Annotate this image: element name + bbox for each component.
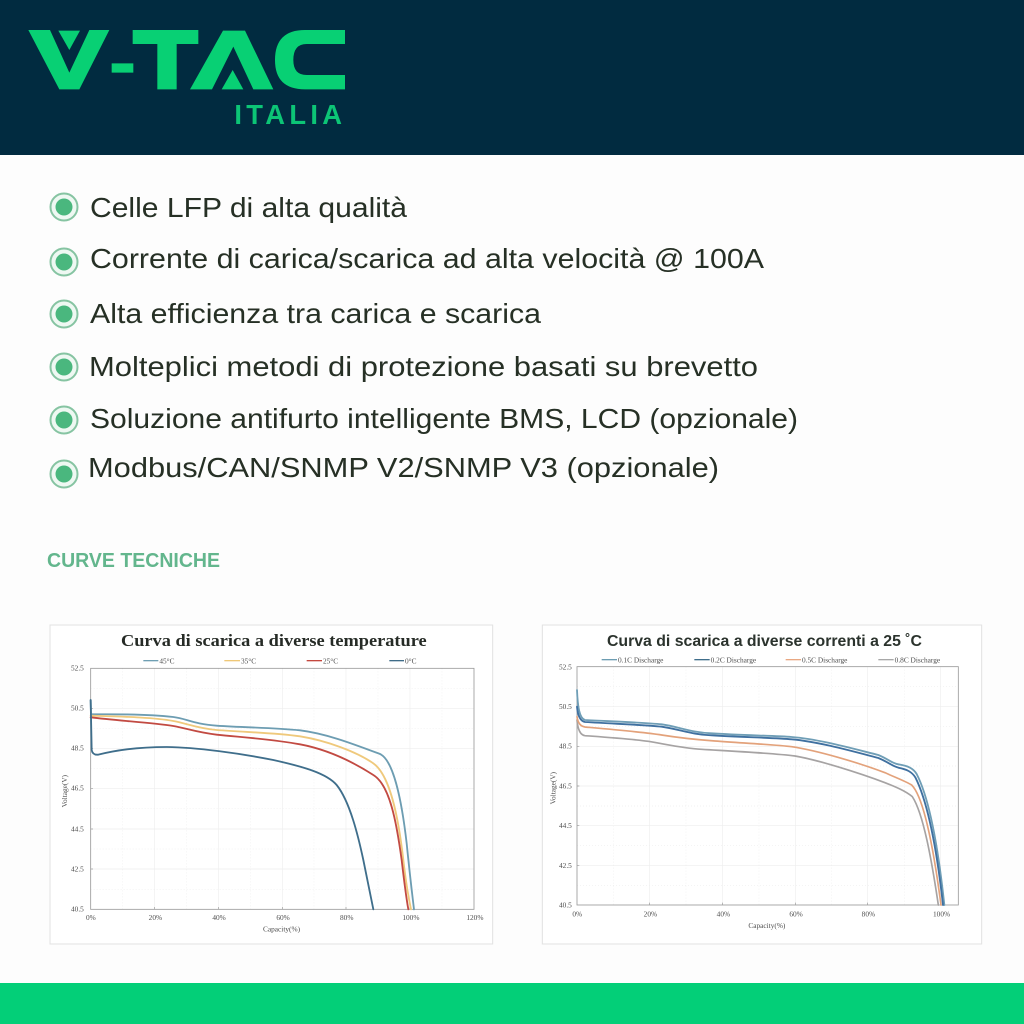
chart title: Curva di scarica a diverse temperature <box>121 631 427 650</box>
x axis labels: Capacity(%) <box>263 925 301 934</box>
legend: 0.1C Discharge <box>618 655 663 664</box>
curve: 0.1C <box>577 690 944 905</box>
panel: temperature discharge chart <box>50 625 493 944</box>
curve: 25C <box>91 717 408 909</box>
bullet item 2: Corrente di carica/scarica ad alta velocità @ 100A <box>90 243 764 274</box>
x axis labels <box>572 909 950 930</box>
legend: 25°C <box>323 656 338 665</box>
x axis labels <box>86 913 483 934</box>
x axis labels: 0% <box>86 913 96 922</box>
x axis labels: Capacity(%) <box>748 921 786 930</box>
x axis labels: 0% <box>572 909 582 918</box>
y axis labels: Voltage(V) <box>60 774 69 807</box>
legend <box>602 655 940 664</box>
curve: 0.2C <box>577 707 943 905</box>
curve: 0.5C <box>577 717 941 905</box>
bullet item 6: Modbus/CAN/SNMP V2/SNMP V3 (opzionale) <box>88 452 719 483</box>
y axis labels: 52.5 <box>71 664 84 673</box>
x axis labels: 80% <box>340 913 353 922</box>
plot grid and axes <box>577 667 958 905</box>
header band with logo <box>0 0 1024 155</box>
y axis labels <box>60 664 84 914</box>
y axis labels: 50.5 <box>71 704 84 713</box>
y axis labels: 40.5 <box>71 905 84 914</box>
y axis labels <box>548 662 572 909</box>
y axis labels: 50.5 <box>559 702 572 711</box>
y axis labels: 48.5 <box>71 744 84 753</box>
y axis labels: 46.5 <box>71 784 84 793</box>
logo: V-TAC Italia <box>28 30 346 130</box>
panel: current discharge chart <box>542 625 982 944</box>
chart title: Curva di scarica a diverse correnti a 25 ˚C <box>607 633 922 650</box>
bullet item 4: Molteplici metodi di protezione basati su brevetto <box>89 351 758 382</box>
bullet item 1: Celle LFP di alta qualità <box>90 192 407 223</box>
legend <box>143 656 417 665</box>
legend: 0.2C Discharge <box>711 655 756 664</box>
x axis labels: 20% <box>644 909 657 918</box>
curve: 0C <box>91 700 373 909</box>
legend: 0°C <box>405 656 417 665</box>
bullet item 3: Alta efficienza tra carica e scarica <box>90 298 541 329</box>
legend: 0.5C Discharge <box>802 655 847 664</box>
legend: 45°C <box>159 656 175 665</box>
x axis labels: 100% <box>402 913 419 922</box>
feature list <box>50 192 798 488</box>
legend: 0.8C Discharge <box>895 655 940 664</box>
plot grid and axes <box>91 668 474 909</box>
footer band <box>0 983 1024 1024</box>
x axis labels: 40% <box>717 909 730 918</box>
y axis labels: 42.5 <box>71 864 84 873</box>
logo: V-TAC Italia: ITALIA <box>234 99 346 130</box>
x axis labels: 80% <box>862 909 875 918</box>
curve: 45C <box>91 700 414 909</box>
x axis labels: 20% <box>149 913 162 922</box>
y axis labels: 52.5 <box>559 662 572 671</box>
x axis labels: 100% <box>933 909 950 918</box>
x axis labels: 120% <box>466 913 483 922</box>
bullet item 5: Soluzione antifurto intelligente BMS, LCD (opzionale) <box>90 403 798 434</box>
y axis labels: 44.5 <box>71 824 84 833</box>
curve: 35C <box>91 716 411 909</box>
y axis labels: 40.5 <box>559 900 572 909</box>
x axis labels: 60% <box>789 909 803 918</box>
y axis labels: 42.5 <box>559 861 572 870</box>
y axis labels: 44.5 <box>559 821 572 830</box>
x axis labels: 40% <box>212 913 226 922</box>
y axis labels: Voltage(V) <box>548 771 557 804</box>
curve: 0.8C <box>577 720 938 905</box>
y axis labels: 46.5 <box>559 781 572 790</box>
x axis labels: 60% <box>276 913 290 922</box>
legend: 35°C <box>241 656 256 665</box>
y axis labels: 48.5 <box>559 742 572 751</box>
section heading: curve tecniche: CURVE TECNICHE <box>47 550 220 572</box>
